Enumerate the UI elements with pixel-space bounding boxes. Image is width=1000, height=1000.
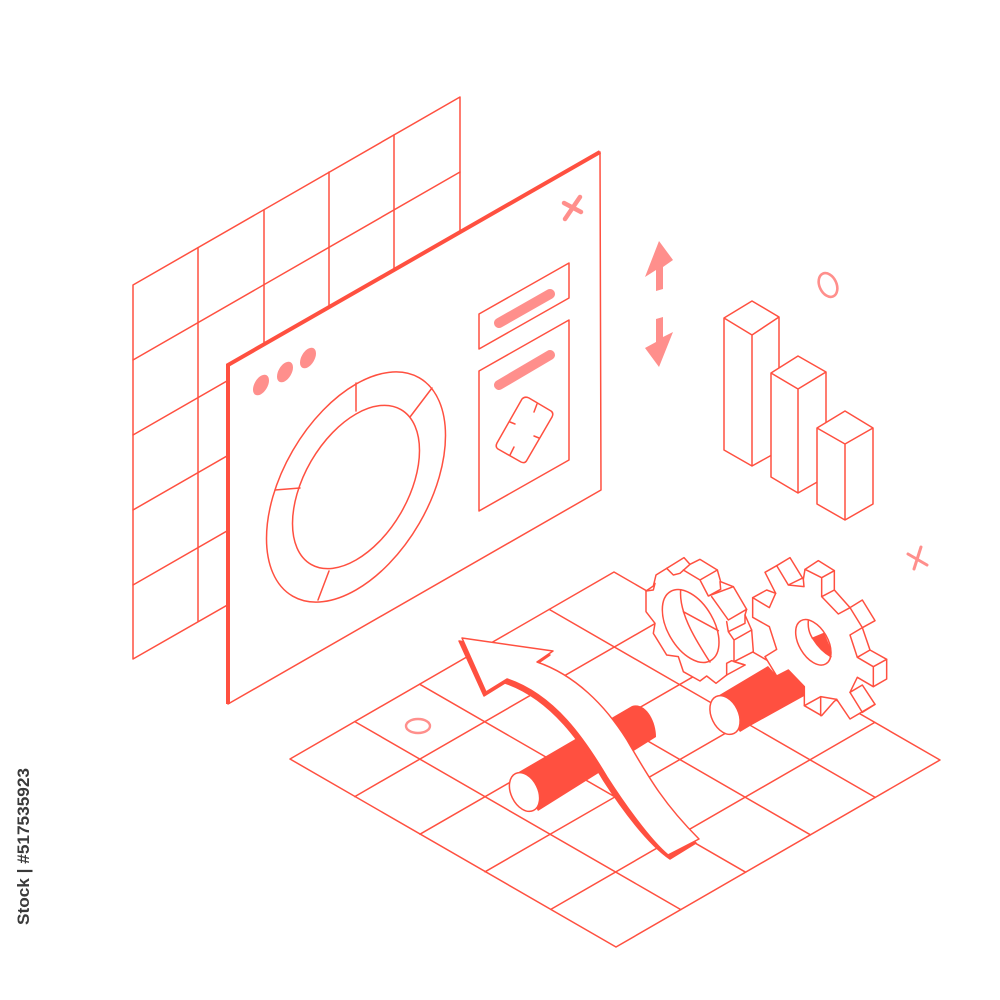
floor grid (290, 572, 940, 947)
window thick frame edge (228, 152, 600, 704)
bar chart (724, 301, 873, 520)
circle accent (815, 270, 841, 300)
window control dots (253, 344, 316, 399)
chip icon (496, 397, 553, 463)
back grid panel (133, 97, 460, 659)
gear: upright front (753, 558, 887, 719)
donut chart (266, 333, 446, 641)
small info card (479, 263, 569, 349)
gear hole (796, 612, 831, 673)
down arrow (645, 317, 673, 367)
close x icon (564, 197, 581, 219)
floor oval accent (406, 719, 430, 733)
rear cylinder (704, 666, 815, 739)
growth arrow (459, 638, 699, 859)
dashboard window panel (228, 152, 601, 704)
front cylinder (503, 705, 656, 816)
stock id caption: Stock | #517535923 (14, 768, 33, 925)
cross accent (908, 547, 927, 569)
large info card (479, 320, 569, 511)
up arrow (645, 241, 673, 291)
gear: tilted back (646, 558, 753, 683)
